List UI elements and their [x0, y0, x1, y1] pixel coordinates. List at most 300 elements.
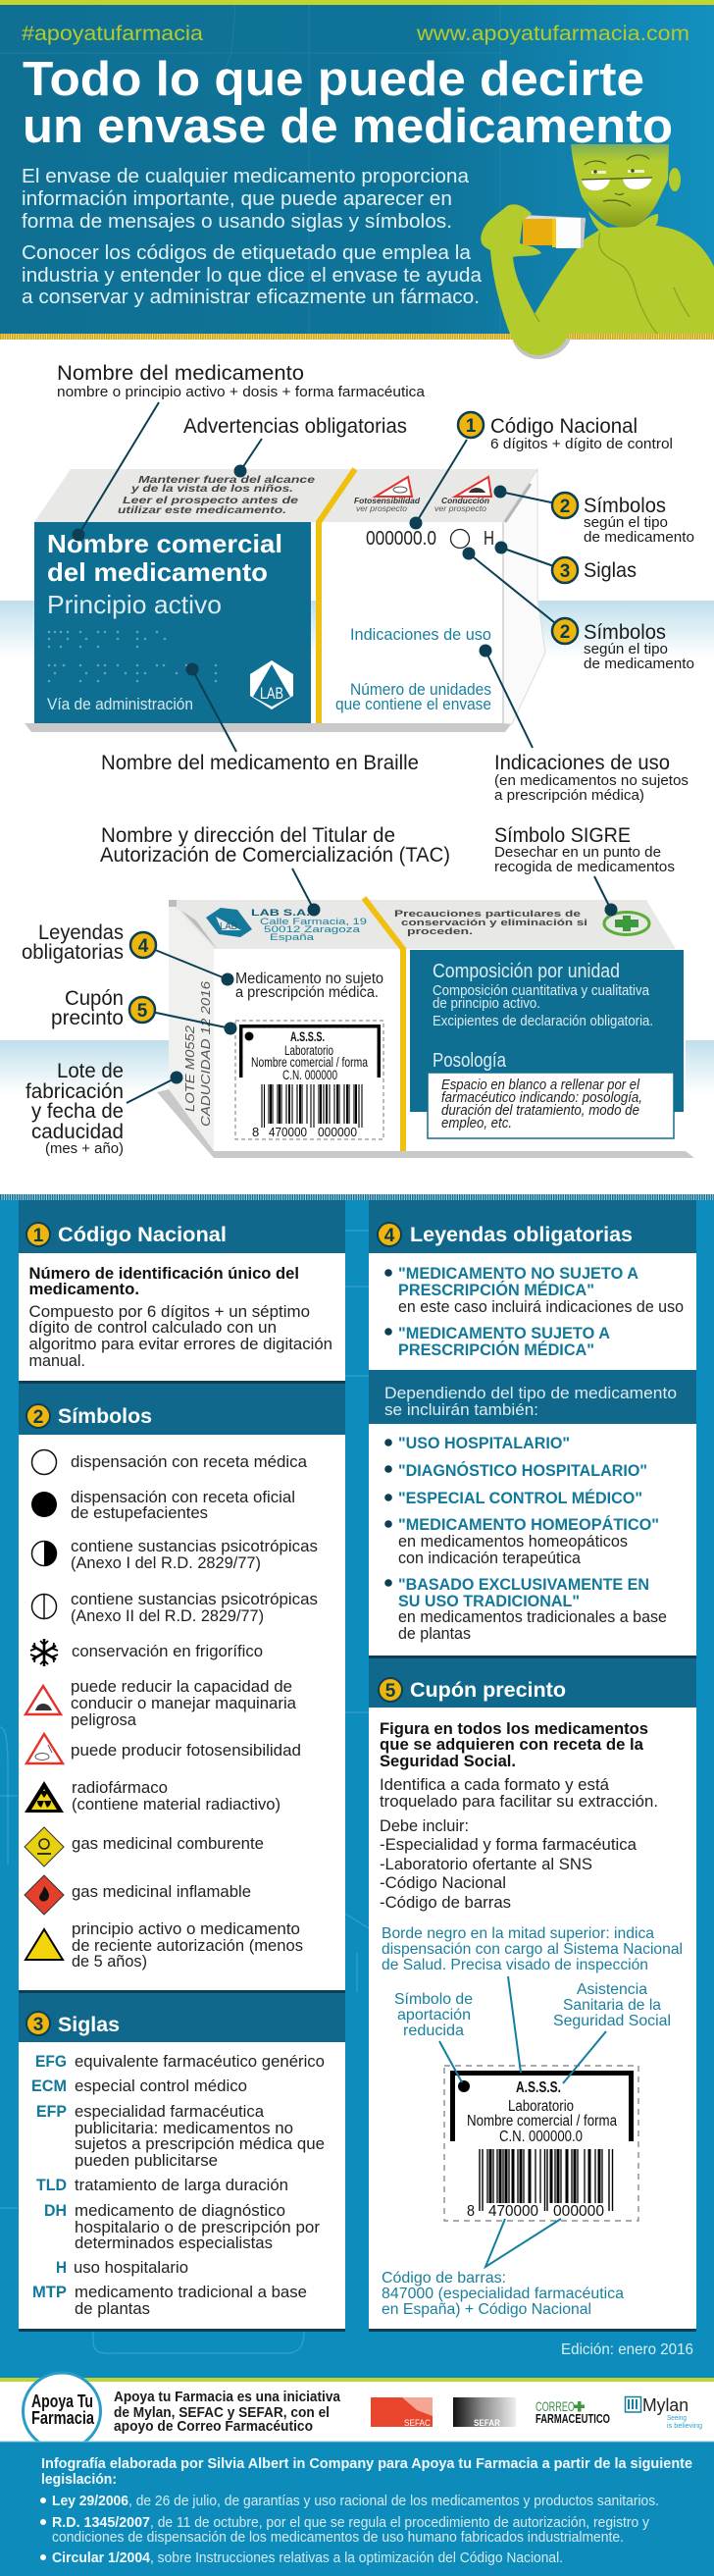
heading: Leyendas obligatorias	[410, 1224, 633, 1246]
footer sponsors band	[0, 2373, 714, 2449]
coupon: Nombre comercial / forma	[251, 1055, 368, 1070]
panel body	[19, 1435, 345, 1990]
marketing holder address: Calle Farmacia, 19	[260, 917, 367, 927]
main blue section background	[0, 1194, 714, 2378]
dosage note box: duración del tratamiento, modo de	[441, 1103, 639, 1119]
barcode note: 847000 (especialidad farmacéutica	[382, 2286, 624, 2302]
badge 3: 3	[560, 561, 570, 582]
law 3: , sobre Instrucciones relativas a la optimización del Código Nacional.	[150, 2550, 563, 2566]
logo: Correo Farmacéutico: CORREO	[536, 2398, 575, 2414]
badge 1	[458, 412, 484, 438]
panel: Siglas	[19, 1993, 345, 2332]
initiative text: Apoya tu Farmacia es una iniciativa	[114, 2389, 341, 2405]
text: new drug: principio activo o medicamento	[72, 1920, 300, 1938]
badge 1: 1	[466, 416, 477, 437]
barcode note: Código de barras:	[382, 2270, 506, 2287]
badge 5: 5	[137, 1001, 148, 1022]
active ingredient: Principio activo	[47, 590, 222, 619]
legend group 2: "USO HOSPITALARIO"	[398, 1435, 570, 1452]
body text: Seguridad Social.	[380, 1753, 516, 1770]
subheader text: Dependiendo del tipo de medicamento	[384, 1385, 677, 1402]
acronym meanings: pueden publicitarse	[75, 2152, 218, 2170]
composition text: Composición por unidad	[433, 961, 620, 982]
diagram: front of the box	[25, 469, 545, 732]
label: coupon: precinto	[51, 1007, 124, 1029]
prescription legend: a prescripción médica.	[235, 984, 379, 1001]
box right face	[503, 469, 545, 724]
coupon text: Laboratorio	[508, 2098, 574, 2115]
legend group 1: "MEDICAMENTO SUJETO A	[398, 1325, 610, 1342]
body text: Identifica a cada formato y está	[380, 1776, 610, 1794]
acronym meanings: uso hospitalario	[74, 2259, 188, 2277]
text: driving: conducir o manejar maquinaria	[71, 1695, 297, 1712]
text: narcotics prescription: de estupefacientes	[71, 1504, 208, 1522]
barcode note	[382, 2270, 624, 2318]
initiative text: de Mylan, SEFAC y SEFAR, con el	[114, 2404, 330, 2421]
badge 5	[379, 1678, 402, 1702]
badge 5: 5	[385, 1681, 396, 1702]
text: refrigerate: conservación en frigorífico	[72, 1643, 263, 1660]
logo: Apoya Tu Farmacia: Farmacia	[31, 2408, 95, 2428]
marketing holder address: España	[270, 932, 315, 943]
prescription legend: Medicamento no sujeto	[235, 971, 383, 987]
badge 1: 1	[33, 1226, 44, 1246]
badge 4	[378, 1223, 401, 1246]
logo: SEFAR	[453, 2397, 516, 2428]
trade name: del medicamento	[47, 557, 268, 587]
badge 3	[552, 557, 578, 583]
top lime bar	[0, 0, 714, 5]
braille dots	[48, 631, 217, 682]
title	[23, 53, 673, 153]
expiry date (rotated): CADUCIDAD 12 2016	[199, 981, 213, 1127]
symbol: circle with vertical line	[31, 1594, 57, 1619]
law 2: condiciones de dispensación de los medicamentos de uso humano fabricados industrialmente.	[52, 2530, 624, 2546]
coupon text: Nombre comercial / forma	[467, 2113, 617, 2129]
panel: Leyendas obligatorias	[369, 1200, 696, 1424]
logo: Apoya Tu Farmacia: Apoya Tu	[31, 2392, 93, 2411]
text: medical prescription: dispensación con receta médica	[71, 1453, 308, 1471]
intro paragraph	[22, 166, 483, 308]
storage precautions: Precauciones particulares de	[394, 909, 581, 920]
white side panel	[322, 522, 503, 723]
label: symbols top: según el tipo	[584, 514, 668, 531]
credit: Infografía elaborada por Silvia Albert in Company para Apoya tu Farmacia a partir de la siguiente	[41, 2456, 692, 2472]
use indications: Indicaciones de uso	[350, 625, 491, 644]
warning text on top face: Mantener fuera del alcance	[138, 475, 316, 486]
eyebrows and face lines	[585, 155, 649, 206]
law bullets	[40, 2497, 46, 2560]
trade name	[47, 529, 282, 587]
label: lot and expiry: y fecha de	[31, 1100, 124, 1123]
icon: driving triangle: Conducción	[441, 497, 489, 505]
blue front panel	[34, 522, 311, 723]
panel body	[19, 2042, 345, 2329]
lime bar	[0, 2378, 714, 2383]
acronyms: ECM	[31, 2077, 67, 2095]
dosage note box: Espacio en blanco a rellenar por el	[441, 1078, 640, 1093]
text: Annex II	[71, 1591, 318, 1625]
intro paragraph: El envase de cualquier medicamento proporciona	[22, 166, 470, 187]
body text: Figura en todos los medicamentos	[380, 1720, 648, 1738]
body text: medicamento.	[29, 1281, 139, 1298]
marketing holder address: LAB S.A.	[251, 908, 310, 919]
body text: dígito de control calculado con un	[29, 1319, 277, 1337]
label: symbols bottom: según el tipo	[584, 641, 668, 657]
text: narcotics prescription	[71, 1489, 295, 1522]
warning text on top face: Leer el prospecto antes de	[123, 496, 299, 506]
callouts: back of the box	[22, 824, 675, 1157]
text: Annex II: contiene sustancias psicotrópicas	[71, 1591, 318, 1608]
social security note: Sanitaria de la	[563, 1997, 661, 2014]
acronyms: TLD	[36, 2177, 67, 2194]
number of units: que contiene el envase	[335, 695, 491, 713]
coupon	[235, 1021, 383, 1139]
label: symbols bottom	[584, 621, 694, 672]
label: marketing authorisation holder: Nombre y dirección del Titular de	[101, 824, 395, 847]
header background	[0, 5, 714, 334]
logo: SEFAC: SEFAC	[404, 2418, 431, 2428]
storage precautions	[394, 909, 587, 937]
title: un envase de medicamento	[23, 100, 673, 153]
header panel	[0, 0, 714, 359]
law 1: , de 26 de julio, de garantías y uso racional de los medicamentos y productos sanitarios.	[128, 2494, 659, 2509]
symbol: driving warning	[26, 1686, 61, 1714]
label: use indications: Indicaciones de uso	[494, 752, 670, 774]
logo: Mylan	[626, 2395, 702, 2430]
leader dots	[73, 465, 508, 675]
acronyms: DH	[44, 2202, 67, 2220]
legend group 2: con indicación terapeútica	[398, 1550, 582, 1567]
acronym meanings: de plantas	[75, 2300, 150, 2318]
label: national code: Código Nacional	[490, 415, 638, 438]
coupon: 470000	[269, 1125, 307, 1139]
acronyms: EFG	[35, 2053, 67, 2071]
first white body	[369, 1253, 696, 1370]
badge 5	[129, 997, 155, 1023]
label: mandatory legends: Leyendas	[38, 921, 124, 944]
acronyms: EFP	[36, 2103, 67, 2121]
law 2: , de 11 de octubre, por el que se regula el procedimiento de autorización, registro y	[150, 2515, 650, 2531]
text: radiopharmaceutical: (contiene material radiactivo)	[72, 1796, 280, 1814]
reduced contribution note	[394, 1991, 473, 2039]
footer background	[0, 2442, 714, 2576]
legend group 2: SU USO TRADICIONAL"	[398, 1593, 580, 1610]
intro paragraph: industria y entender lo que dice el envase te ayuda	[22, 265, 483, 287]
label: use indications: a prescripción médica)	[494, 787, 644, 804]
small box in hand	[523, 215, 586, 248]
label: lot and expiry	[26, 1060, 124, 1157]
symbol: new drug triangle	[26, 1929, 63, 1960]
box shadow	[25, 723, 512, 732]
label: national code: 6 dígitos + dígito de control	[490, 436, 673, 452]
initiative text: apoyo de Correo Farmacéutico	[114, 2418, 313, 2435]
number of units	[335, 680, 491, 713]
heading: Símbolos	[58, 1405, 152, 1428]
legend group 2: "ESPECIAL CONTROL MÉDICO"	[398, 1489, 642, 1507]
composition text	[433, 961, 653, 1072]
subheader band	[369, 1370, 696, 1424]
black border note	[382, 1925, 683, 1973]
social security note	[553, 1981, 671, 2029]
text: new drug	[72, 1920, 303, 1971]
coupon text	[467, 2079, 617, 2145]
lot number (rotated): LOTE M0552	[183, 1025, 197, 1112]
legend group 1: PRESCRIPCIÓN MÉDICA"	[398, 1281, 594, 1299]
logo: Mylan: Mylan	[642, 2395, 688, 2415]
body text: Debe incluir:	[380, 1817, 469, 1835]
ear	[669, 168, 681, 191]
body text: Compuesto por 6 dígitos + un séptimo	[29, 1303, 310, 1321]
panel: Código Nacional	[19, 1200, 345, 1384]
coupon: 8	[252, 1125, 259, 1139]
legend group 1: en este caso incluirá indicaciones de uso	[398, 1298, 684, 1316]
legend group 2	[398, 1435, 667, 1643]
panel: Símbolos	[19, 1384, 345, 1993]
dosage note box: farmacéutico indicando: posología,	[441, 1090, 642, 1106]
label: mandatory legends	[22, 921, 124, 964]
coupon leader lines	[439, 1976, 606, 2267]
trade name: Nombre comercial	[47, 529, 282, 558]
symbol: snowflake	[30, 1639, 58, 1666]
composition panel	[410, 950, 684, 1112]
acronym meanings: sujetos a prescripción médica que	[75, 2135, 325, 2153]
subheader text: se incluirán también:	[384, 1401, 538, 1419]
icon: LAB logo on top face	[206, 908, 252, 937]
box shadow	[157, 1089, 694, 1158]
acronym meanings	[74, 2053, 325, 2318]
acronym meanings: medicamento tradicional a base	[75, 2284, 307, 2301]
white band	[0, 2382, 714, 2442]
initiative text	[114, 2389, 341, 2435]
intro paragraph: Conocer los códigos de etiquetado que emplea la	[22, 242, 472, 264]
label: marketing authorisation holder	[100, 824, 450, 867]
logo: Apoya Tu Farmacia	[24, 2373, 100, 2449]
icon: LAB hexagon logo	[250, 660, 293, 710]
label: SIGRE	[494, 824, 675, 875]
body text	[380, 1720, 658, 1912]
coupon: A.S.S.S.	[290, 1029, 325, 1044]
body text: troquelado para facilitar su extracción.	[380, 1793, 658, 1811]
panel header	[19, 1993, 345, 2042]
credit: legislación:	[41, 2472, 117, 2488]
black border note: dispensación con cargo al Sistema Nacional	[382, 1941, 683, 1958]
law 3: Circular 1/2004	[52, 2550, 150, 2566]
text: Annex I	[71, 1538, 318, 1572]
icon: driving triangle: ver prospecto	[434, 504, 487, 513]
text: new drug: de 5 años)	[72, 1953, 147, 1971]
body text: -Especialidad y forma farmacéutica	[380, 1836, 638, 1854]
label: drug name: Nombre del medicamento	[57, 362, 304, 385]
acronym meanings: tratamiento de larga duración	[75, 2177, 288, 2194]
badge 2	[26, 1404, 50, 1428]
hashtag: #apoyatufarmacia	[22, 23, 203, 45]
top face	[169, 900, 676, 949]
text: Annex I: (Anexo I del R.D. 2829/77)	[71, 1554, 261, 1572]
label: warnings: Advertencias obligatorias	[183, 415, 407, 438]
legend group 2: "BASADO EXCLUSIVAMENTE EN	[398, 1576, 649, 1594]
text: new drug: de reciente autorización (menos	[72, 1937, 303, 1955]
barcode digits: 8	[467, 2203, 475, 2220]
acronyms: H	[56, 2259, 67, 2277]
label: lot and expiry: (mes + año)	[45, 1140, 124, 1157]
logo: Mylan: Seeing	[667, 2415, 687, 2422]
legend group 2: "DIAGNÓSTICO HOSPITALARIO"	[398, 1461, 647, 1480]
text: flammable gas: gas medicinal inflamable	[72, 1883, 251, 1901]
badge 4: 4	[384, 1226, 395, 1246]
prescription legend	[235, 971, 383, 1001]
coupon text: A.S.S.S.	[516, 2079, 561, 2096]
badge 2 bottom	[552, 618, 578, 644]
thumb over box	[505, 204, 532, 247]
label: use indications: (en medicamentos no sujetos	[494, 772, 688, 789]
social security note: Seguridad Social	[553, 2013, 671, 2029]
body text: -Laboratorio ofertante al SNS	[380, 1856, 592, 1873]
title: Todo lo que puede decirte	[23, 53, 644, 106]
acronym meanings: especialidad farmacéutica	[75, 2103, 265, 2121]
symbol: oxidising gas diamond	[25, 1827, 64, 1866]
intro paragraph: a conservar y administrar eficazmente un fármaco.	[22, 287, 480, 308]
warning text on top face: utilizar este medicamento.	[118, 505, 286, 516]
reduced contribution note: reducida	[403, 2023, 464, 2039]
heading: Código Nacional	[58, 1224, 227, 1246]
national code: 000000.0	[366, 528, 436, 550]
symbol: flammable gas diamond	[25, 1875, 64, 1915]
label: coupon	[51, 987, 124, 1029]
label: symbols top	[584, 495, 694, 546]
icon: driving triangle	[434, 477, 491, 513]
text: Annex II: (Anexo II del R.D. 2829/77)	[71, 1607, 264, 1625]
coupon: C.N. 000000	[282, 1068, 337, 1082]
barcode digits: 470000	[488, 2203, 538, 2220]
barcode digits	[467, 2203, 604, 2220]
label: braille: Nombre del medicamento en Braille	[101, 752, 419, 774]
legend group 1: "MEDICAMENTO NO SUJETO A	[398, 1265, 638, 1283]
composition text: Posología	[433, 1050, 507, 1072]
symbol: half circle	[31, 1541, 57, 1566]
body text: algoritmo para evitar errores de digitación	[29, 1336, 332, 1353]
black border note: Borde negro en la mitad superior: indica	[382, 1925, 654, 1942]
panel: additional legends	[369, 1424, 696, 1658]
panel: Cupón precinto	[369, 1658, 696, 2332]
acronym meanings: equivalente farmacéutico genérico	[75, 2053, 325, 2071]
logo: Correo Farmacéutico	[536, 2398, 610, 2426]
legend group 2: de plantas	[398, 1625, 471, 1643]
panel header	[369, 1200, 696, 1253]
text: driving: puede reducir la capacidad de	[71, 1678, 292, 1696]
label: coupon: Cupón	[65, 987, 124, 1010]
marketing holder address	[251, 908, 367, 943]
icon: photosensitivity triangle	[354, 477, 421, 513]
acronyms: MTP	[32, 2284, 67, 2301]
law 1: Ley 29/2006	[52, 2494, 128, 2509]
label: symbols bottom: de medicamento	[584, 656, 694, 672]
label: lot and expiry: Lote de	[57, 1060, 124, 1082]
body and arm	[481, 204, 714, 355]
coupon: Laboratorio	[284, 1043, 333, 1058]
footer legislation	[0, 2442, 714, 2576]
black bracket	[453, 2073, 632, 2141]
label: lot and expiry: fabricación	[26, 1080, 124, 1103]
black border note: de Salud. Precisa visado de inspección	[382, 1957, 648, 1973]
text: radiopharmaceutical: radiofármaco	[72, 1779, 168, 1797]
label: symbols bottom: Símbolos	[584, 621, 666, 644]
barcode digits: 000000	[553, 2203, 604, 2220]
body text	[29, 1265, 332, 1370]
legend group 1: PRESCRIPCIÓN MÉDICA"	[398, 1341, 594, 1359]
bullets	[384, 1269, 392, 1336]
label: lot and expiry: caducidad	[31, 1121, 124, 1143]
label: acronyms: Siglas	[584, 559, 637, 582]
social security note: Asistencia	[577, 1981, 647, 1998]
coupon text: C.N. 000000.0	[499, 2129, 583, 2145]
symbol: radioactive	[25, 1781, 64, 1813]
reduced contribution dot	[458, 2080, 470, 2092]
yellow fold	[364, 898, 403, 1151]
label: SIGRE: recogida de medicamentos	[494, 859, 675, 875]
acronyms	[31, 2053, 67, 2301]
label: mandatory legends: obligatorias	[22, 941, 124, 964]
yellow strip	[0, 334, 714, 340]
icon: photosensitivity triangle: ver prospecto	[356, 504, 408, 513]
H acronym: H	[484, 528, 494, 550]
panel header	[19, 1200, 345, 1253]
head	[571, 144, 669, 228]
badge 3: 3	[33, 2015, 43, 2035]
logo: SEFAR: SEFAR	[474, 2418, 500, 2428]
panel body	[369, 1708, 696, 2329]
logo: Mylan: is believing	[667, 2423, 702, 2430]
badge 2 top: 2	[560, 497, 570, 517]
box top face	[34, 469, 537, 522]
law 2	[52, 2515, 650, 2546]
leader lines	[78, 402, 565, 752]
icon: SIGRE recycling	[604, 913, 649, 934]
glasses	[582, 178, 652, 190]
heading: Cupón precinto	[410, 1679, 566, 1702]
text: photosensitivity: puede producir fotosensibilidad	[71, 1742, 301, 1760]
barcode note: en España) + Código Nacional	[382, 2301, 591, 2318]
text: narcotics prescription: dispensación con receta oficial	[71, 1489, 295, 1506]
storage precautions: conservación y eliminación si	[401, 918, 587, 928]
label: symbols top: Símbolos	[584, 495, 666, 517]
subheader text	[384, 1385, 677, 1419]
text: Annex I: contiene sustancias psicotrópicas	[71, 1538, 318, 1555]
prescription circle	[451, 530, 469, 548]
reduced contribution note: aportación	[397, 2007, 471, 2024]
text: oxidising gas: gas medicinal comburente	[72, 1835, 264, 1853]
badge 2: 2	[33, 1407, 43, 1428]
intro paragraph: forma de mensajes o usando siglas y símbolos.	[22, 211, 452, 233]
panel header	[19, 1384, 345, 1435]
composition text: Excipientes de declaración obligatoria.	[433, 1014, 653, 1029]
label: drug name	[57, 362, 426, 400]
body text: -Código Nacional	[380, 1874, 506, 1892]
law 2: R.D. 1345/2007	[52, 2515, 150, 2531]
acronym meanings: especial control médico	[75, 2077, 247, 2095]
label: national code	[490, 415, 673, 452]
bullets	[384, 1439, 392, 1587]
reduced contribution note: Símbolo de	[394, 1991, 473, 2008]
illustration: green character holding a box	[481, 144, 714, 359]
body fold lines	[510, 226, 689, 334]
body text: que se adquieren con receta de la	[380, 1736, 644, 1754]
composition text: de principio activo.	[433, 996, 540, 1012]
panel header	[369, 1658, 696, 1708]
badge 3	[26, 2012, 50, 2035]
body text: Número de identificación único del	[29, 1265, 299, 1283]
route of administration: Vía de administración	[47, 695, 193, 713]
